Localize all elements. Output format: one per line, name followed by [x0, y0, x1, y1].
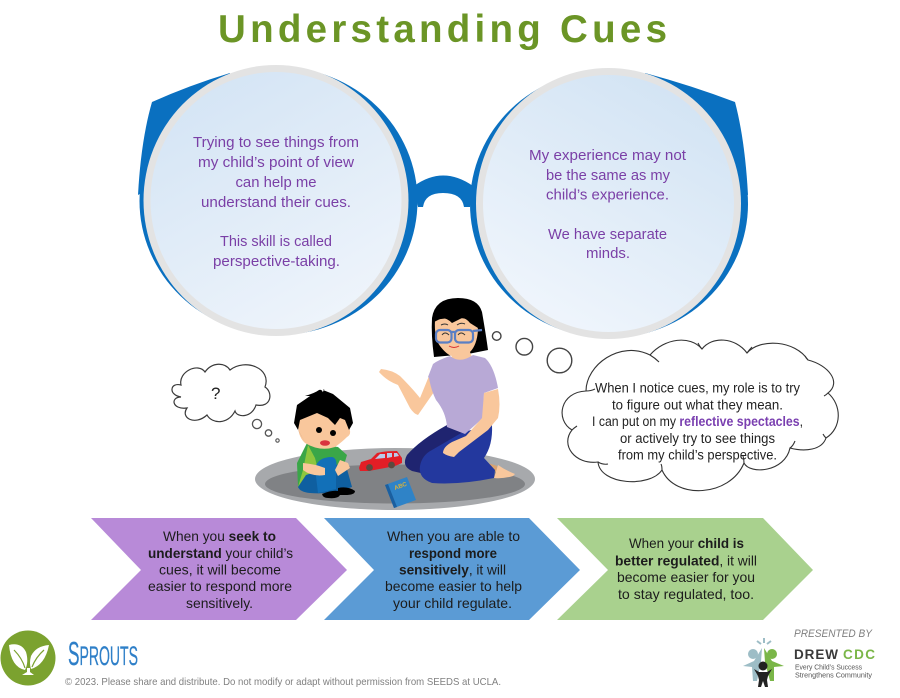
child's thought cloud: [172, 364, 279, 442]
left lens frame: [138, 67, 418, 335]
left lens: [144, 65, 408, 336]
hair tuft: [305, 390, 323, 396]
chevron: child better regulated: [557, 518, 813, 620]
chevron: seek to understand: sensitively.: [186, 595, 253, 611]
illustration: toy car: [359, 451, 402, 471]
presented by: PRESENTED BY: [794, 628, 873, 640]
folded arms: [303, 460, 350, 476]
chevron: seek to understand: understand your child’s: [148, 545, 293, 561]
chevron: seek to understand: [91, 518, 347, 620]
chevron: child better regulated: better regulated, it will: [615, 552, 757, 568]
neck and face: [435, 318, 478, 363]
mother's thought bubbles: [492, 332, 572, 373]
right lens text: My experience may not: [529, 147, 687, 164]
mother's thought cloud: [562, 340, 838, 491]
child's thought cloud: ?: [211, 384, 220, 403]
shoes: [322, 487, 355, 498]
illustration: book: [385, 477, 416, 508]
chevron: child better regulated: to stay regulated, too.: [618, 586, 754, 602]
shirt: [428, 355, 498, 434]
bare foot: [494, 465, 515, 478]
mother's thought cloud: When I notice cues, my role is to try: [595, 380, 800, 396]
chevron: respond more sensitively: respond more: [409, 545, 497, 561]
right lens text: minds.: [586, 245, 630, 262]
back leg: [405, 425, 475, 474]
right lens frame: [470, 70, 748, 338]
illustration: book: ABC: [394, 482, 409, 492]
illustration: sad child: [294, 389, 355, 498]
raised arm: [379, 369, 434, 415]
chevron: respond more sensitively: [324, 518, 580, 620]
right lens: [476, 68, 741, 339]
hair: [294, 389, 353, 442]
trousers: [298, 462, 352, 493]
leaves: [9, 644, 49, 670]
left lens text: [193, 134, 359, 270]
chevron: respond more sensitively: sensitively, it will: [399, 562, 506, 578]
left lens text: perspective-taking.: [213, 253, 340, 270]
back foot: [482, 461, 497, 472]
chevron: respond more sensitively: become easier to help: [385, 578, 522, 594]
title: Understanding Cues: [218, 8, 667, 51]
Sprouts logo: [0, 630, 138, 686]
DREW CDC wordmark: DREW: [794, 647, 838, 662]
left lens text: This skill is called: [220, 233, 332, 250]
tagline: Strengthens Community: [795, 670, 872, 680]
hair back: [432, 298, 488, 357]
chevron: respond more sensitively: your child regulate.: [393, 595, 512, 611]
chevron: child better regulated: When your child is: [629, 535, 744, 551]
DREW CDC wordmark: [794, 647, 875, 662]
left lens text: understand their cues.: [201, 194, 351, 211]
chevron: seek to understand: cues, it will become: [159, 562, 281, 578]
logo icon: [743, 638, 784, 687]
mother's thought cloud: or actively try to see things: [620, 431, 775, 446]
left lens text: can help me: [236, 174, 316, 191]
right lens text: be the same as my: [546, 167, 670, 184]
mother's thought cloud: to figure out what they mean.: [612, 398, 783, 412]
front leg: [420, 425, 495, 483]
glasses: [436, 330, 482, 342]
leaf veins: [14, 650, 44, 668]
glasses bridge: [414, 176, 473, 207]
right lens text: [529, 147, 687, 262]
left lens text: Trying to see things from: [193, 134, 359, 151]
chevron: child better regulated: become easier for you: [617, 569, 755, 585]
tagline: Every Child’s Success: [795, 662, 862, 672]
mother's thought cloud: I can put on my reflective spectacles,: [592, 414, 803, 429]
mother's thought cloud: from my child’s perspective.: [618, 448, 777, 462]
eyes and mouth: [316, 427, 336, 446]
chevron: seek to understand: When you seek to: [163, 528, 276, 544]
resting arm and hand: [443, 389, 500, 457]
left lens text: my child’s point of view: [198, 154, 354, 171]
right lens text: We have separate: [548, 226, 667, 243]
spectacles illustration: [138, 65, 748, 339]
shirt: [297, 443, 347, 487]
wordmark: SPROUTS: [68, 635, 138, 672]
illustration: mother wearing glasses: [379, 298, 515, 483]
presenter: Drew CDC logo: [743, 628, 875, 687]
chevron: respond more sensitively: When you are able to: [387, 528, 520, 544]
chevron: seek to understand: easier to respond more: [148, 578, 292, 594]
smiling eyes and mouth: [441, 323, 465, 348]
tagline: [795, 662, 872, 680]
face: [298, 405, 350, 449]
knees: [315, 457, 336, 493]
DREW CDC wordmark: CDC: [843, 647, 875, 662]
fringe: [434, 300, 481, 328]
copyright notice: © 2023. Please share and distribute. Do not modify or adapt without permission from SEEDS at UCLA.: [65, 676, 501, 688]
stem: [22, 668, 34, 675]
right lens text: child’s experience.: [546, 186, 669, 204]
rug: [255, 448, 535, 510]
